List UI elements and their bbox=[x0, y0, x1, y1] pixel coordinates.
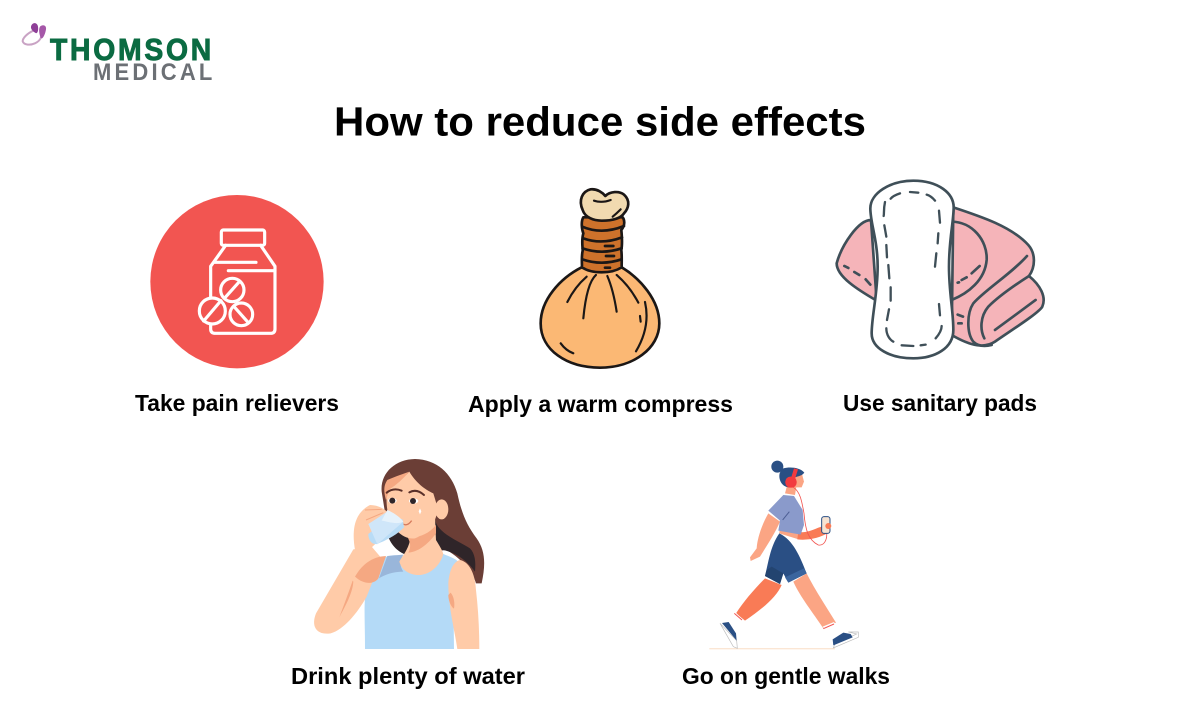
panel: use sanitary pads bbox=[837, 181, 1044, 416]
icon: sanitary pad and folded towel bbox=[837, 181, 1044, 358]
panel: apply a warm compress bbox=[468, 189, 733, 417]
illustration: woman drinking water bbox=[314, 459, 484, 649]
label: Use sanitary pads bbox=[843, 390, 1037, 416]
icon: red circle with pill bottle bbox=[150, 195, 324, 368]
label: Take pain relievers bbox=[135, 390, 339, 416]
label: Go on gentle walks bbox=[682, 663, 890, 689]
icon: herbal compress bbox=[541, 189, 659, 368]
label: Drink plenty of water bbox=[291, 663, 525, 689]
wordmark: MEDICAL: MEDICAL bbox=[93, 58, 216, 85]
logo: Thomson Medical bbox=[23, 23, 216, 85]
label: Apply a warm compress bbox=[468, 391, 733, 417]
illustration: woman walking with headphones bbox=[709, 461, 858, 649]
icon: butterfly heart bbox=[23, 23, 46, 45]
panel: take pain relievers bbox=[135, 195, 339, 416]
panel: drink plenty of water bbox=[291, 459, 525, 689]
title: How to reduce side effects bbox=[334, 98, 866, 144]
wordmark: THOMSON: THOMSON bbox=[50, 33, 214, 67]
panel: go on gentle walks bbox=[682, 461, 890, 689]
